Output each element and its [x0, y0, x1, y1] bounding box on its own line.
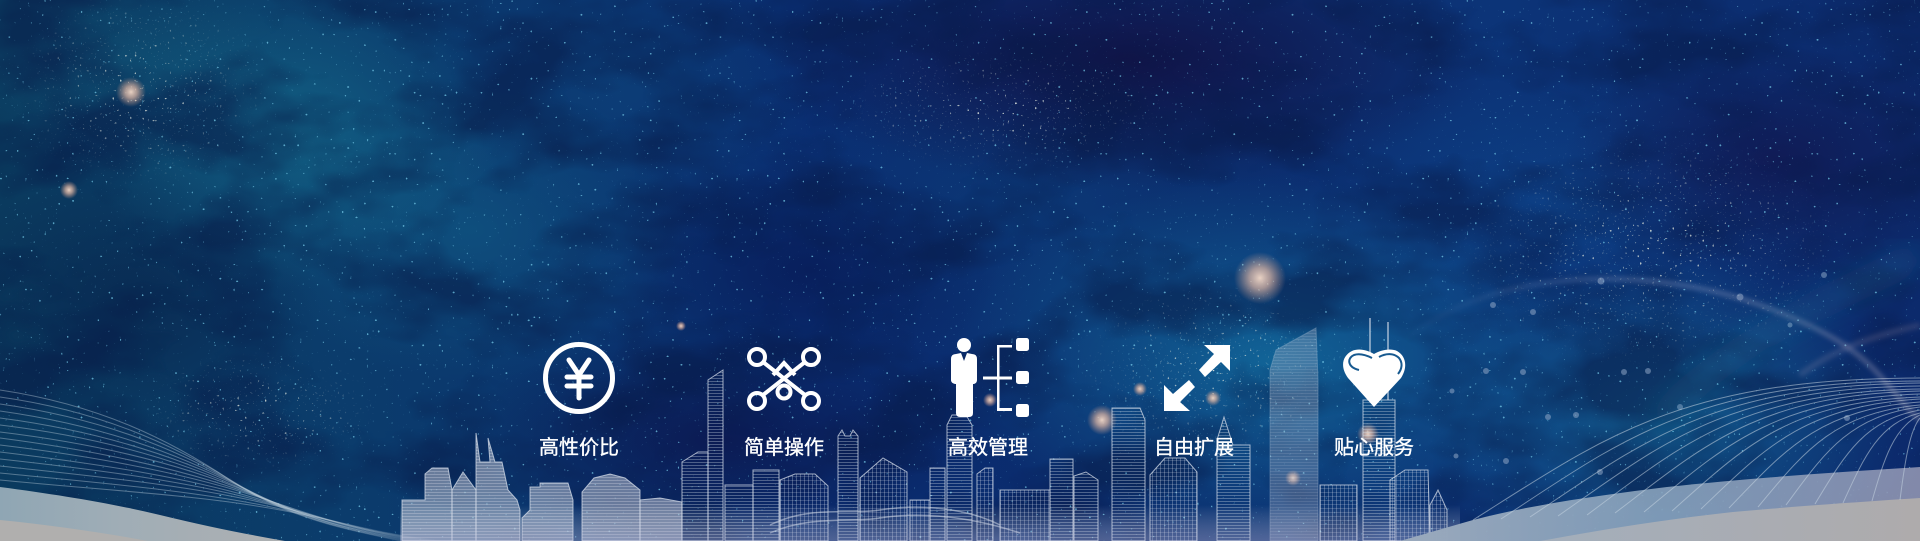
icon: connected nodes: [749, 349, 819, 409]
icon: expand arrows: [1164, 345, 1230, 411]
label: free expansion: 自由扩展: [1154, 437, 1234, 459]
icon: heart with ribbon: [1343, 350, 1405, 407]
label: efficient management: 高效管理: [948, 437, 1028, 459]
icon: manager org chart: [951, 338, 1029, 417]
icon: yen coin: [546, 344, 612, 412]
label: simple operation: 简单操作: [744, 437, 824, 459]
label: caring service: 贴心服务: [1334, 437, 1414, 459]
label: high value: 高性价比: [539, 437, 619, 459]
